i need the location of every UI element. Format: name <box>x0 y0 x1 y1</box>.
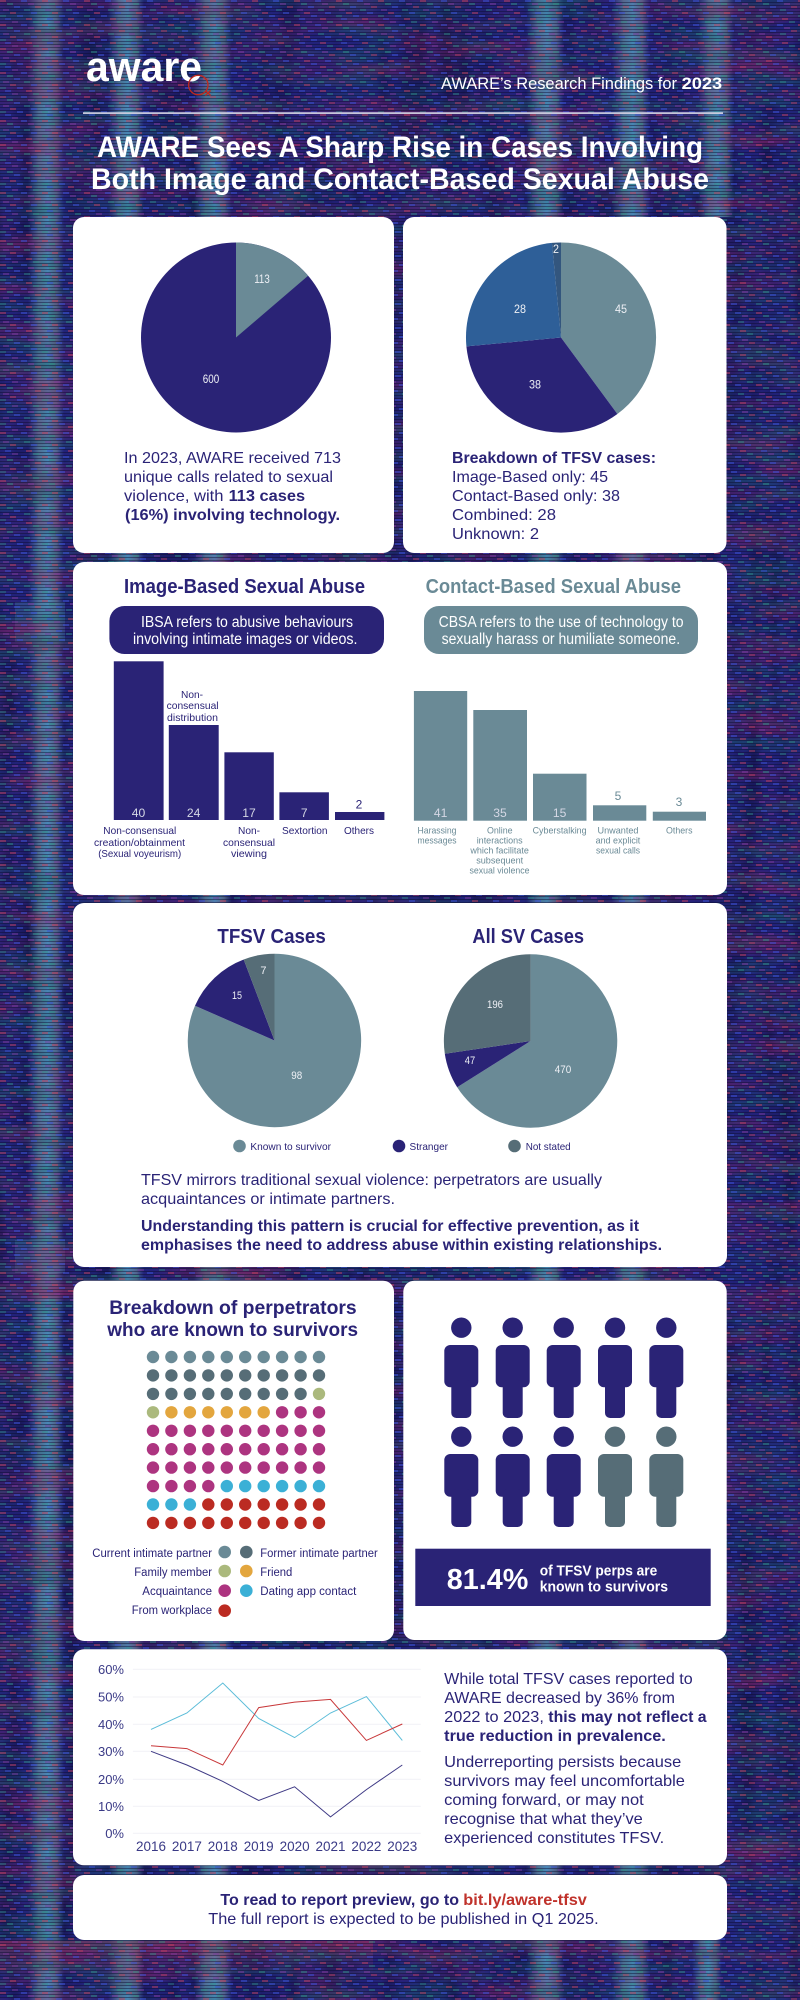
line chart: perpetrator trend 2016 to 2023 <box>98 1662 421 1854</box>
heading: TFSV cases: TFSV Cases <box>217 925 326 948</box>
bar chart: contact-based abuse: 15 <box>553 806 567 820</box>
line chart: perpetrator trend 2016 to 2023: 2019 <box>244 1838 274 1854</box>
bar chart: image-based abuse: 40 <box>132 806 146 820</box>
callout: CBSA definition <box>424 606 698 654</box>
line chart: perpetrator trend 2016 to 2023: 2018 <box>208 1838 238 1854</box>
legend: relationship to survivor: Dating app contact <box>260 1586 357 1598</box>
line chart: perpetrator trend 2016 to 2023: 20% <box>98 1772 124 1787</box>
text: report link: bit.ly/aware-tfsv <box>463 1892 587 1909</box>
line chart: perpetrator trend 2016 to 2023: 40% <box>98 1717 124 1732</box>
pie chart: TFSV perpetrators: 7 <box>260 965 266 977</box>
text: breakdown list: Unknown: 2 <box>452 526 539 543</box>
legend: perpetrator type <box>233 1140 571 1153</box>
bar chart: contact-based abuse: sexual calls <box>596 846 640 856</box>
bar chart: contact-based abuse: 5 <box>615 789 622 803</box>
text: TFSV pattern explanation: Understanding this pattern is crucial for effective prevention, as it <box>141 1218 640 1235</box>
text: TFSV pattern explanation: TFSV mirrors traditional sexual violence: perpetrators are usually <box>141 1172 602 1189</box>
heading: image-based: Image-Based Sexual Abuse <box>124 575 365 598</box>
bar chart: image-based abuse: 24 <box>187 806 201 820</box>
legend: relationship to survivor <box>92 1546 378 1617</box>
legend: relationship to survivor: Current intimate partner <box>92 1548 212 1560</box>
panel: TFSV versus all SV cases <box>73 903 727 1267</box>
title: Both Image and Contact-Based Sexual Abuse <box>91 163 709 196</box>
bar chart: contact-based abuse: subsequent <box>476 856 524 866</box>
text: trend explanation: this may not reflect a <box>548 1709 707 1726</box>
text: total calls caption: violence, with <box>124 488 224 505</box>
bar chart: image-based abuse: Non-consensual <box>103 825 176 837</box>
pie chart: TFSV case types: 2 <box>553 242 559 256</box>
callout: 81.4% banner <box>415 1549 711 1606</box>
heading: breakdown of perpetrators: who are known to survivors <box>106 1319 358 1341</box>
bar chart: image-based abuse: 7 <box>301 806 308 820</box>
bar chart: contact-based abuse: Others <box>666 826 693 836</box>
callout: CBSA definition: CBSA refers to the use of technology to <box>439 614 684 631</box>
text: trend explanation: AWARE decreased by 36% from <box>444 1690 675 1707</box>
text: report link <box>208 1892 599 1928</box>
bar chart: contact-based abuse: 35 <box>493 806 507 820</box>
callout: 81.4% banner: of TFSV perps are <box>540 1564 657 1580</box>
pie chart: TFSV perpetrators: 98 <box>291 1070 302 1082</box>
bar chart: contact-based abuse: 3 <box>676 795 683 809</box>
text: report link: To read to report preview, go to <box>220 1892 459 1909</box>
bar chart: contact-based abuse: sexual violence <box>470 866 530 876</box>
bar chart: contact-based abuse: Cyberstalking <box>533 826 587 836</box>
title: AWARE Sees A Sharp Rise in Cases Involving <box>97 131 703 164</box>
bar chart: contact-based abuse: which facilitate <box>469 846 529 856</box>
legend: relationship to survivor: Acquaintance <box>142 1586 212 1598</box>
text: trend explanation: While total TFSV cases reported to <box>444 1671 693 1688</box>
pie chart: TFSV case types: 45 <box>615 302 627 316</box>
panel: report link <box>73 1875 727 1940</box>
icon row: people top <box>444 1318 683 1418</box>
bar chart: contact-based abuse: and explicit <box>596 836 641 846</box>
callout: IBSA definition: involving intimate images or videos. <box>133 631 358 648</box>
legend: perpetrator type: Not stated <box>526 1141 571 1153</box>
heading: contact-based: Contact-Based Sexual Abuse <box>426 575 681 598</box>
text: total calls caption: In 2023, AWARE received 713 <box>124 450 341 467</box>
text: total calls caption: unique calls related to sexual <box>124 469 333 486</box>
pie chart: TFSV case types: 38 <box>529 378 541 392</box>
line chart: perpetrator trend 2016 to 2023: 2023 <box>387 1838 417 1854</box>
panel: image and contact based abuse <box>73 562 727 895</box>
pie chart: TFSV case types: 28 <box>514 302 526 316</box>
pie chart: TFSV perpetrators: 15 <box>232 990 242 1002</box>
text: breakdown list: Breakdown of TFSV cases: <box>452 450 656 467</box>
line chart: perpetrator trend 2016 to 2023: 0% <box>105 1826 124 1841</box>
bar chart: image-based abuse: distribution <box>167 712 218 724</box>
legend: perpetrator type: Known to survivor <box>250 1141 331 1153</box>
text: trend explanation <box>444 1671 707 1847</box>
header tagline: AWARE’s Research Findings for <box>441 74 677 93</box>
text: report link: The full report is expected to be published in Q1 2025. <box>208 1911 599 1928</box>
bar chart: image-based abuse: (Sexual voyeurism) <box>98 848 181 860</box>
heading: breakdown of perpetrators <box>106 1297 358 1341</box>
line chart: perpetrator trend 2016 to 2023: 30% <box>98 1744 124 1759</box>
logo: aware: aware <box>86 43 202 90</box>
bar chart: contact-based abuse <box>414 691 706 876</box>
callout: 81.4% banner: 81.4% <box>447 1564 529 1596</box>
text: trend explanation: recognise that what they’ve <box>444 1811 643 1828</box>
legend: relationship to survivor: From workplace <box>132 1605 212 1617</box>
callout: IBSA definition <box>109 606 384 654</box>
pie chart: all SV perpetrators: 470 <box>555 1064 571 1076</box>
text: TFSV pattern explanation: emphasises the need to address abuse within existing relationships. <box>141 1237 662 1254</box>
bar chart: contact-based abuse: Harassing <box>418 826 456 836</box>
text: breakdown list: Combined: 28 <box>452 507 556 524</box>
pie chart: total calls: 600 <box>203 372 220 386</box>
text: breakdown list: Contact-Based only: 38 <box>452 488 620 505</box>
bar chart: contact-based abuse: Unwanted <box>598 826 638 836</box>
bar chart: image-based abuse: Non- <box>238 825 260 837</box>
pie chart: total calls: 113 <box>254 272 270 286</box>
line chart: perpetrator trend 2016 to 2023: 2017 <box>172 1838 202 1854</box>
line chart: perpetrator trend 2016 to 2023: 60% <box>98 1662 124 1677</box>
text: TFSV pattern explanation <box>141 1172 662 1254</box>
pie chart: all SV perpetrators <box>444 954 617 1128</box>
panel: breakdown of known perpetrators <box>73 1281 394 1641</box>
text: trend explanation: Underreporting persists because <box>444 1754 681 1771</box>
waffle chart: 100 dots <box>147 1351 325 1529</box>
bar chart: image-based abuse: Non- <box>181 689 203 701</box>
pie chart: TFSV case types <box>466 242 656 433</box>
panel: 81.4 percent known to survivors <box>403 1281 727 1640</box>
heading: all SV cases: All SV Cases <box>472 925 584 948</box>
pie chart: TFSV perpetrators <box>188 954 361 1127</box>
text: total calls caption: 113 cases <box>229 488 305 505</box>
bar chart: image-based abuse: consensual <box>223 837 275 849</box>
bar chart: image-based abuse: Others <box>344 825 374 837</box>
bar chart: image-based abuse <box>94 661 384 860</box>
line chart: perpetrator trend 2016 to 2023: 2020 <box>280 1838 310 1854</box>
panel: trend over time <box>73 1649 727 1865</box>
bar chart: contact-based abuse: messages <box>418 836 457 846</box>
text: total calls caption: (16%) involving technology. <box>125 507 340 524</box>
callout: IBSA definition: IBSA refers to abusive behaviours <box>141 614 353 631</box>
bar chart: image-based abuse: 2 <box>356 798 363 812</box>
text: trend explanation: coming forward, or may not <box>444 1792 644 1809</box>
bar chart: contact-based abuse: interactions <box>477 836 523 846</box>
line chart: perpetrator trend 2016 to 2023: 50% <box>98 1690 124 1704</box>
bar chart: image-based abuse: creation/obtainment <box>94 837 185 849</box>
legend: relationship to survivor: Friend <box>260 1567 292 1579</box>
text: breakdown list: Image-Based only: 45 <box>452 469 608 486</box>
line chart: perpetrator trend 2016 to 2023: 2021 <box>316 1838 346 1854</box>
text: trend explanation: true reduction in prevalence. <box>444 1728 666 1745</box>
bar chart: image-based abuse: viewing <box>231 848 267 860</box>
title <box>91 131 709 196</box>
pie chart: total calls <box>141 242 331 432</box>
legend: relationship to survivor: Family member <box>134 1567 212 1579</box>
legend: perpetrator type: Stranger <box>410 1141 448 1153</box>
icon row: people bottom <box>444 1426 683 1527</box>
bar chart: image-based abuse: Sextortion <box>282 825 328 837</box>
callout: 81.4% banner: known to survivors <box>540 1580 668 1596</box>
callout: CBSA definition: sexually harass or humiliate someone. <box>442 631 680 648</box>
bar chart: image-based abuse: 17 <box>242 806 256 820</box>
bar chart: contact-based abuse: 41 <box>434 806 448 820</box>
header tagline: 2023 <box>682 74 722 93</box>
pie chart: all SV perpetrators: 47 <box>465 1055 475 1067</box>
text: breakdown list <box>452 450 656 543</box>
bar chart: contact-based abuse: Online <box>487 826 513 836</box>
panel: breakdown of TFSV cases <box>403 217 726 553</box>
heading: breakdown of perpetrators: Breakdown of perpetrators <box>109 1297 357 1319</box>
panel: total calls <box>73 217 394 553</box>
line chart: perpetrator trend 2016 to 2023: 2022 <box>351 1838 382 1854</box>
bar chart: image-based abuse: consensual <box>167 700 219 712</box>
line chart: perpetrator trend 2016 to 2023: 10% <box>98 1799 124 1814</box>
pie chart: all SV perpetrators: 196 <box>487 999 503 1011</box>
legend: relationship to survivor: Former intimate partner <box>260 1548 378 1560</box>
line chart: perpetrator trend 2016 to 2023: 2016 <box>136 1838 166 1854</box>
text: trend explanation: 2022 to 2023, <box>444 1709 544 1726</box>
text: total calls caption <box>124 450 341 524</box>
text: TFSV pattern explanation: acquaintances or intimate partners. <box>141 1191 395 1208</box>
text: trend explanation: survivors may feel uncomfortable <box>444 1773 685 1790</box>
text: trend explanation: experienced constitutes TFSV. <box>444 1830 664 1847</box>
